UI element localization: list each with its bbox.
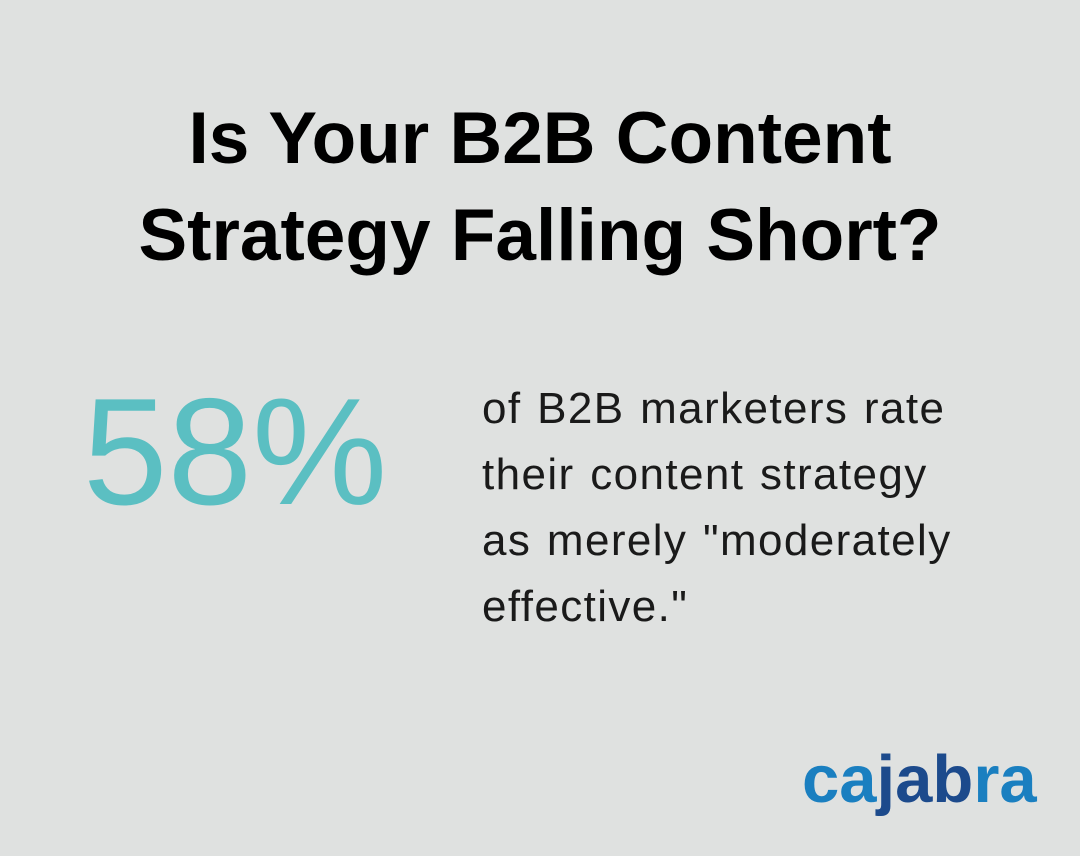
stat description bbox=[482, 384, 952, 631]
logo: cajabra bbox=[802, 742, 1037, 817]
stat description: of B2B marketers rate bbox=[482, 384, 945, 433]
stat description: their content strategy bbox=[482, 450, 928, 499]
stat description: as merely "moderately bbox=[482, 516, 952, 565]
title: Strategy Falling Short? bbox=[138, 195, 942, 276]
big stat: 58% bbox=[83, 367, 387, 537]
title bbox=[138, 98, 942, 276]
title: Is Your B2B Content bbox=[188, 98, 892, 179]
stat description: effective." bbox=[482, 582, 688, 631]
